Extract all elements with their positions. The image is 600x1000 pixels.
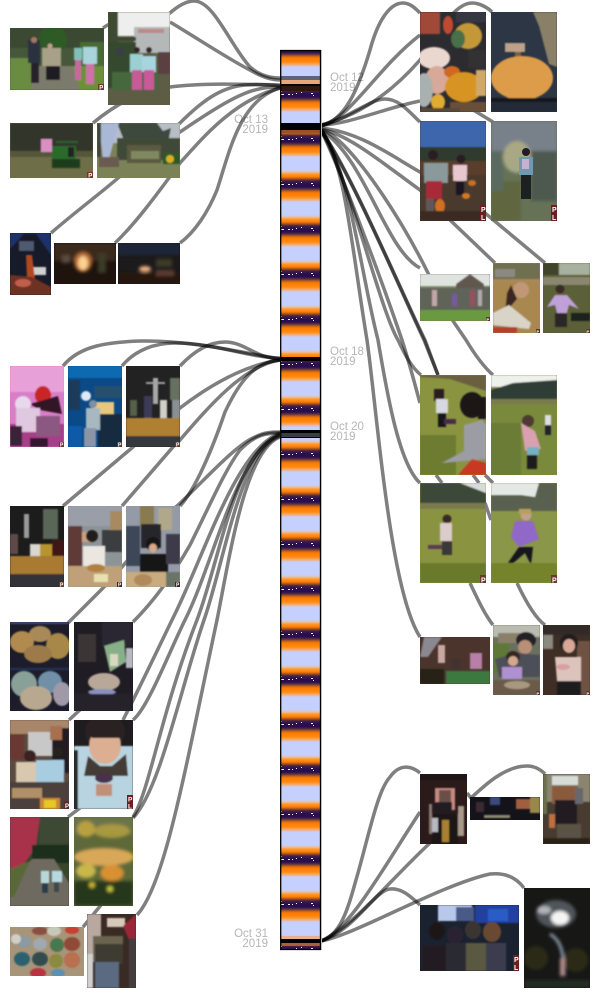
date label: Oct 13 2019: [234, 114, 268, 136]
date label: Oct 13 2019: Oct 13: [234, 114, 268, 126]
badge: P L: L: [481, 215, 486, 222]
badge: P: P: [536, 691, 540, 696]
badge: P: P: [118, 583, 122, 589]
photo: girl eating on sofa: [543, 625, 590, 696]
photo: firework: [524, 888, 590, 988]
badge: P L: L: [514, 965, 519, 972]
photo: two girls walking under red maple: [10, 817, 69, 906]
photo: shelves of yarn: [10, 622, 71, 711]
photo: night street panorama: [470, 797, 540, 820]
date label: Oct 12 2019: [330, 72, 364, 94]
date label: Oct 12 2019: 2019: [330, 82, 356, 94]
date label: Oct 31 2019: 2019: [242, 938, 268, 950]
photo: bonfire at night: [54, 243, 116, 284]
badge: P L: [551, 205, 557, 222]
badge: P L: [127, 795, 133, 810]
date label: Oct 18 2019: Oct 18: [330, 346, 364, 358]
photo: girl in dappled branches: [491, 121, 557, 222]
badge: P: P: [65, 804, 69, 810]
badge: P: P: [88, 174, 92, 180]
photo: pink stage scene: [10, 366, 64, 449]
connector curves: left side: [51, 1, 280, 927]
photo: girls at fence with barn: [420, 274, 490, 322]
photo: girls on green tractor bucket: [108, 12, 170, 105]
photo: girl close-up in golden grass: [493, 263, 540, 334]
date label: Oct 13 2019: 2019: [242, 124, 268, 136]
photo: blue lit doorway with costume: [68, 366, 122, 449]
date label: Oct 12 2019: Oct 12: [330, 72, 364, 84]
badge: P: P: [99, 86, 103, 92]
timeline bar: [280, 50, 322, 950]
photo: trick or treaters on porch: [420, 774, 467, 844]
photo: skeleton backdrop with kids and table: [126, 366, 180, 449]
photo: jar of paintbrushes: [87, 914, 136, 988]
connector curves: right side: [321, 3, 545, 941]
photo: girl in pink dancing in field: [491, 375, 557, 475]
photo: family with wheelchair on path: [10, 26, 104, 92]
photo: girl eating at craft table: [126, 506, 180, 589]
badge: P L: L: [128, 804, 132, 810]
badge: P L: [513, 955, 519, 972]
date label: Oct 31 2019: Oct 31: [234, 928, 268, 940]
badge: P L: P: [481, 207, 486, 214]
date label: Oct 18 2019: [330, 346, 364, 368]
photo: four girls in costume at night: [420, 905, 519, 972]
photo: girl in pink running: [543, 263, 590, 334]
photo: girls running across grass close-up: [420, 375, 486, 475]
photo: big orange pumpkin: [491, 12, 557, 112]
photo: girl running toward field: [420, 483, 486, 584]
photo: mini tractor pulling girls in field: [10, 123, 93, 180]
date label: Oct 31 2019: [234, 928, 268, 950]
badge: P: P: [486, 317, 490, 322]
badge: P L: P: [552, 207, 557, 214]
photo: two girls at cluttered table in yurt: [10, 720, 69, 810]
date label: Oct 20 2019: Oct 20: [330, 421, 364, 433]
badge: P: P: [536, 329, 540, 334]
photo: pumpkins and gourds display: [415, 12, 486, 112]
photo: girl at craft table: [68, 506, 122, 589]
badge: P: P: [60, 583, 64, 589]
badge: P L: L: [552, 215, 557, 222]
badge: P L: P: [128, 796, 133, 804]
badge: P: P: [176, 443, 180, 449]
badge: P L: P: [514, 957, 519, 964]
photo: skeleton backdrop wide table: [10, 506, 64, 589]
badge: P: P: [586, 329, 590, 334]
badge: P: P: [481, 578, 486, 584]
photo: paint tins: [10, 926, 84, 978]
photo: portrait of girl with spindle: [74, 714, 133, 810]
photo: child and teen at table: [493, 625, 540, 696]
badge: P: P: [60, 443, 64, 449]
badge: P: P: [552, 578, 557, 584]
date label: Oct 18 2019: 2019: [330, 356, 356, 368]
photo: distant fire at dusk: [118, 243, 180, 284]
date label: Oct 20 2019: [330, 421, 364, 443]
photo: barn with embers: [10, 233, 51, 295]
badge: P: P: [118, 443, 122, 449]
photo: three girls in barn: [420, 637, 490, 684]
photo: kids on lit stairs: [543, 774, 590, 844]
date label: Oct 20 2019: 2019: [330, 431, 356, 443]
badge: P: P: [586, 691, 590, 696]
photo: steam plume and tractor tent: [97, 123, 180, 178]
photo: pincushion figure on dark shelf: [74, 622, 133, 711]
badge: P: P: [176, 583, 180, 589]
photo: autumn yellow foliage: [74, 817, 134, 906]
photo: two girls in pumpkin patch: [420, 121, 486, 222]
photo: girl in purple hoodie running: [491, 483, 557, 584]
badge: P L: [480, 205, 486, 222]
